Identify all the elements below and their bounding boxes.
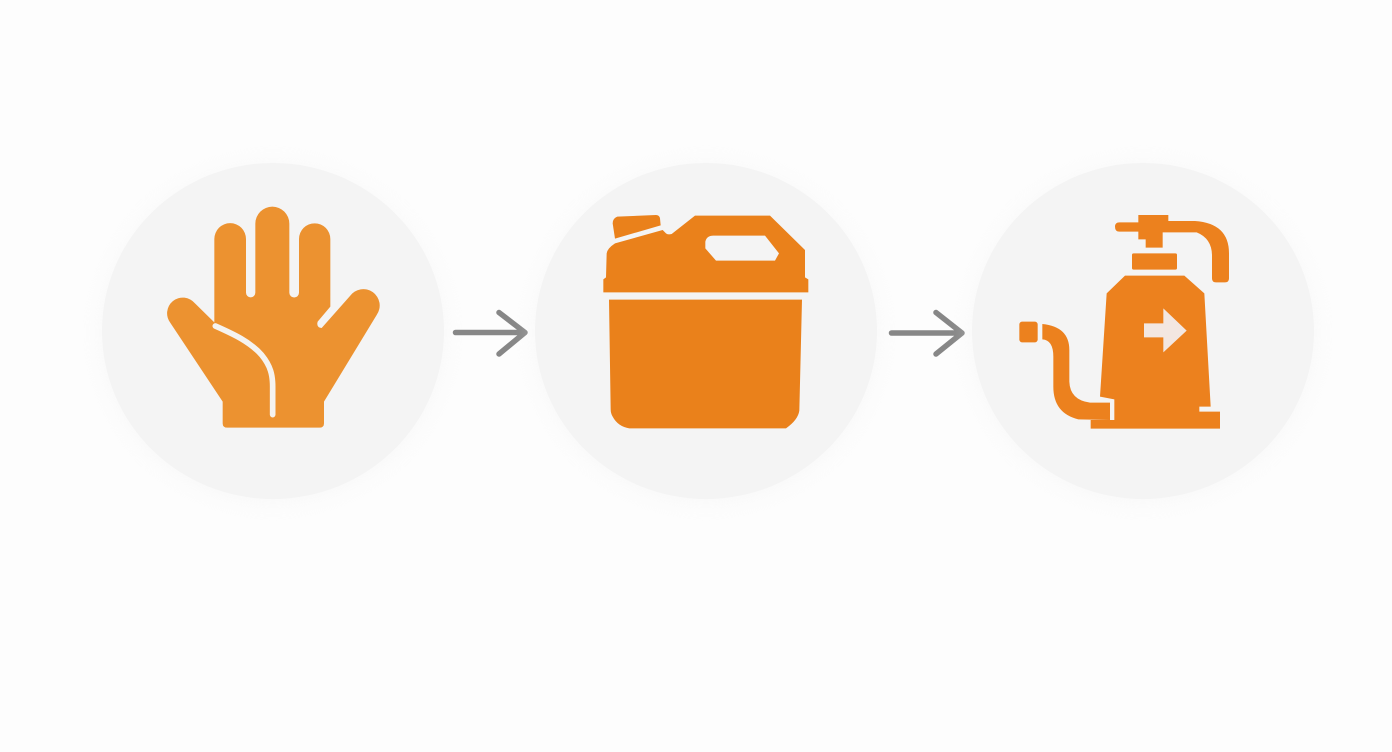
sprayer body	[1091, 276, 1220, 429]
right-pointing arrow	[1144, 308, 1187, 352]
sprayer head and spout	[1115, 215, 1229, 282]
hose	[1042, 324, 1110, 420]
step 1: hand	[99, 162, 447, 504]
step 3: pump sprayer	[969, 162, 1317, 504]
icon: jerry can	[603, 215, 808, 428]
circle background: jug	[535, 163, 877, 499]
step 2: jug	[532, 162, 880, 504]
arrow: step 1 to step 2	[456, 312, 525, 354]
arrow: step 2 to step 3	[892, 312, 962, 354]
circle background: hand	[102, 163, 444, 499]
hose end cap	[1019, 322, 1038, 342]
icon: pump sprayer	[1019, 215, 1229, 429]
circle background: sprayer	[972, 163, 1314, 499]
sprayer collar	[1132, 253, 1177, 270]
icon: hand	[167, 207, 380, 428]
